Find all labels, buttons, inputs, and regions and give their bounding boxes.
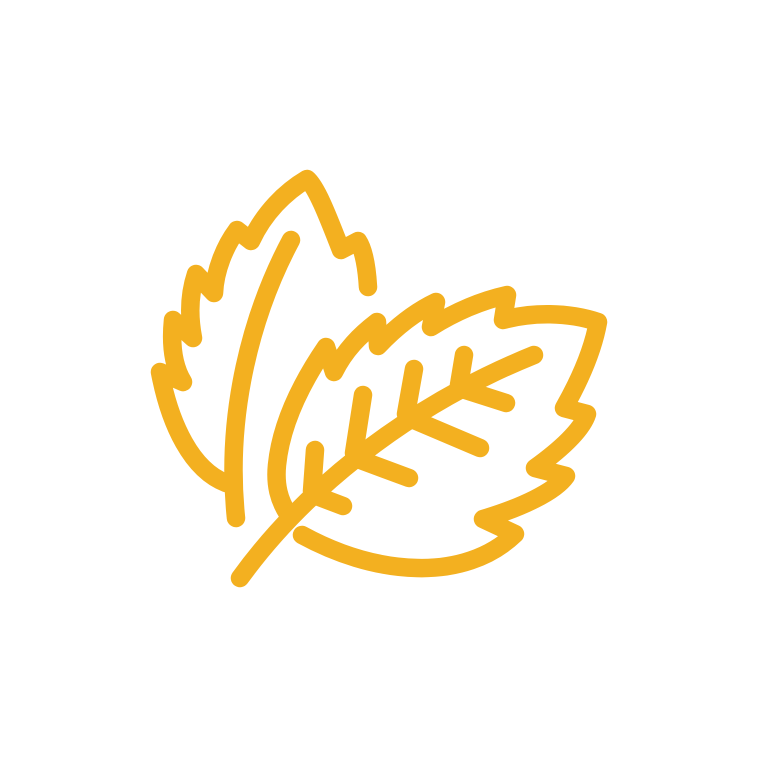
front leaf midrib	[240, 355, 534, 578]
vein 4	[459, 355, 506, 403]
vein 2	[354, 395, 409, 478]
back leaf midrib	[234, 240, 291, 518]
back leaf outline	[160, 179, 368, 483]
vein 3	[406, 369, 480, 448]
vein 1	[312, 450, 343, 506]
front leaf outline	[276, 295, 598, 568]
